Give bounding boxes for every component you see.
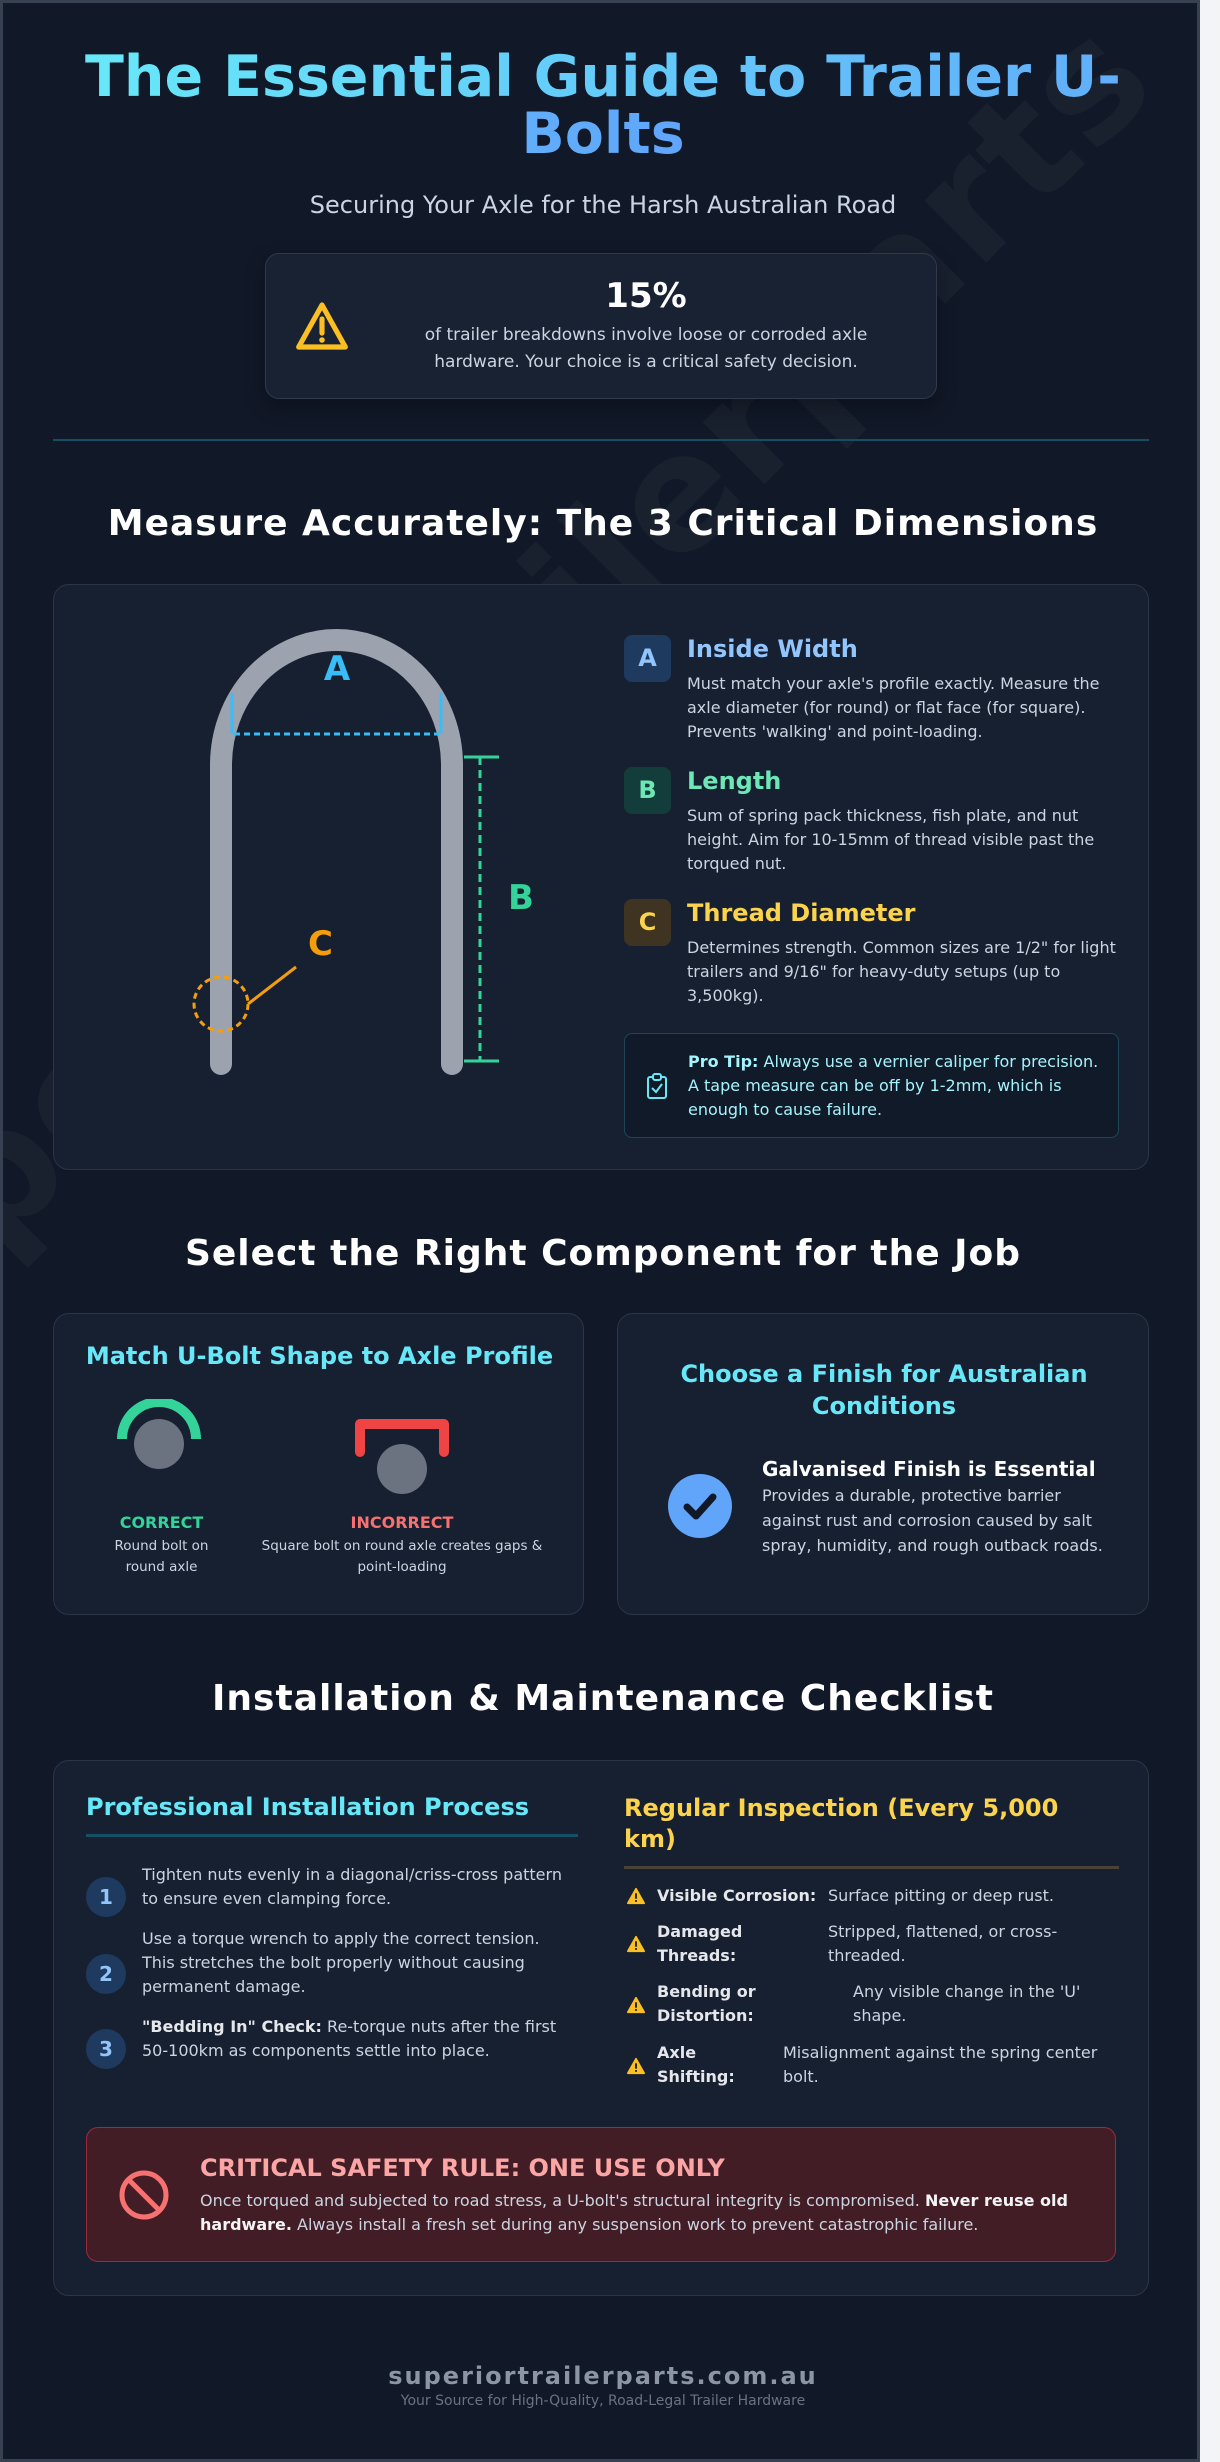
label: incorrect: INCORRECT (351, 1513, 453, 1532)
inspection column: Visible Corrosion: (657, 1886, 816, 1905)
item A: Inside Width (687, 635, 858, 663)
panel: finish: Provides a durable, protective barrier against rust and corrosion caused by salt spray, humidity, and rough outback roads. (762, 1486, 1103, 1555)
panel: shape: Match U-Bolt Shape to Axle Profile (86, 1342, 553, 1370)
footer: Your Source for High-Quality, Road-Legal Trailer Hardware (401, 2393, 805, 2409)
item C: C (639, 908, 656, 936)
installation column: "Bedding In" Check: Re-torque nuts after the first 50-100km as components settle into place. (142, 2017, 556, 2060)
callout: critical safety rule (86, 2127, 1116, 2262)
title: Bolts (521, 101, 685, 167)
label: correct: CORRECT (120, 1513, 203, 1532)
inspection column: Surface pitting or deep rust. (828, 1886, 1054, 1905)
item: threads (627, 1936, 645, 1952)
inspection column: Distortion: (657, 2006, 754, 2025)
title: The Essential Guide to Trailer U- (85, 44, 1121, 110)
inspection column: Threads: (657, 1946, 736, 1965)
item: bending (627, 1996, 645, 2014)
item C: Determines strength. Common sizes are 1/2" for light trailers and 9/16" for heavy-duty setups (up to 3,500kg). (687, 938, 1116, 1005)
step 3 (86, 2029, 126, 2069)
installation column: Tighten nuts evenly in a diagonal/criss-cross pattern to ensure even clamping force. (142, 1865, 562, 1908)
panel: finish: Choose a Finish for Australian Conditions (680, 1360, 1088, 1420)
item C: Thread Diameter (687, 899, 916, 927)
inspection column: Damaged (657, 1922, 742, 1941)
inspection column: Bending or (657, 1982, 756, 2001)
item C (624, 899, 1116, 1005)
callout: critical safety rule: Once torqued and subjected to road stress, a U-bolt's structural integrity is compromised. Never reuse old hardware. Always install a fresh set during any suspension work to prevent catastrophic failure. (200, 2191, 1068, 2234)
item A: Must match your axle's profile exactly. Measure the axle diameter (for round) or flat face (for square). Prevents 'walking' and point-loading. (687, 674, 1099, 741)
installation column: Use a torque wrench to apply the correct tension. This stretches the bolt properly without causing permanent damage. (142, 1929, 540, 1996)
icon: prohibited (120, 2170, 168, 2220)
icon: warning (296, 302, 348, 350)
item B (624, 767, 1094, 873)
item B: Length (687, 767, 781, 795)
footer: superiortrailerparts.com.au (388, 2362, 818, 2390)
panel: finish (617, 1313, 1149, 1615)
step 3: 3 (99, 2037, 113, 2061)
title (85, 44, 1121, 167)
diagram: u-bolt (192, 629, 534, 1075)
footer (388, 2362, 818, 2409)
label: correct: Round bolt on round axle (114, 1538, 208, 1575)
inspection column: Regular Inspection (Every 5,000 km) (624, 1794, 1058, 1853)
inspection column: Shifting: (657, 2067, 735, 2086)
heading: select: Select the Right Component for the Job (185, 1233, 1021, 1274)
label: incorrect (262, 1513, 542, 1575)
panel: finish: Galvanised Finish is Essential (762, 1457, 1096, 1481)
diagram: u-bolt: A (324, 649, 351, 689)
label: correct (114, 1513, 208, 1575)
item: corrosion (627, 1888, 645, 1904)
stat number: 15% (605, 276, 687, 316)
step 2: 2 (99, 1962, 113, 1986)
stat text: of trailer breakdowns involve loose or corroded axle hardware. Your choice is a critical safety decision. (425, 325, 867, 372)
label: incorrect: Square bolt on round axle creates gaps & point-loading (262, 1538, 542, 1575)
heading: checklist: Installation & Maintenance Checklist (212, 1678, 994, 1719)
item A: A (638, 644, 657, 672)
diagram: u-bolt: C (308, 924, 333, 964)
panel: dimensions (53, 584, 1149, 1170)
heading: measure: Measure Accurately: The 3 Critical Dimensions (108, 503, 1098, 544)
panel: checklist (53, 1760, 1149, 2296)
inspection column: Stripped, flattened, or cross-threaded. (828, 1922, 1057, 1965)
installation column: Professional Installation Process (86, 1793, 529, 1821)
item: shifting (627, 2058, 645, 2074)
item A (624, 635, 1099, 741)
callout: pro tip: Pro Tip: Always use a vernier caliper for precision. A tape measure can be off by 1-2mm, which is enough to cause failure. (688, 1052, 1098, 1119)
icon: correct fit (117, 1399, 201, 1469)
inspection column: Any visible change in the 'U' shape. (853, 1982, 1080, 2025)
subtitle: Securing Your Axle for the Harsh Australian Road (310, 191, 896, 219)
item B: B (638, 776, 657, 804)
step 1 (86, 1877, 126, 1917)
inspection column (624, 1794, 1119, 2086)
icon: incorrect fit (355, 1419, 449, 1494)
icon: check (668, 1474, 732, 1538)
inspection column: Misalignment against the spring center bolt. (783, 2043, 1097, 2086)
diagram: u-bolt: B (508, 878, 534, 918)
step 1: 1 (99, 1885, 113, 1909)
panel: shape (53, 1313, 584, 1615)
stat callout (265, 253, 937, 399)
installation column (86, 1793, 578, 2069)
item B: Sum of spring pack thickness, fish plate, and nut height. Aim for 10-15mm of thread visible past the torqued nut. (687, 806, 1094, 873)
callout: critical safety rule: CRITICAL SAFETY RULE: ONE USE ONLY (200, 2154, 725, 2182)
inspection column: Axle (657, 2043, 696, 2062)
step 2 (86, 1954, 126, 1994)
icon: clipboard (647, 1073, 667, 1099)
callout: pro tip (624, 1033, 1119, 1138)
